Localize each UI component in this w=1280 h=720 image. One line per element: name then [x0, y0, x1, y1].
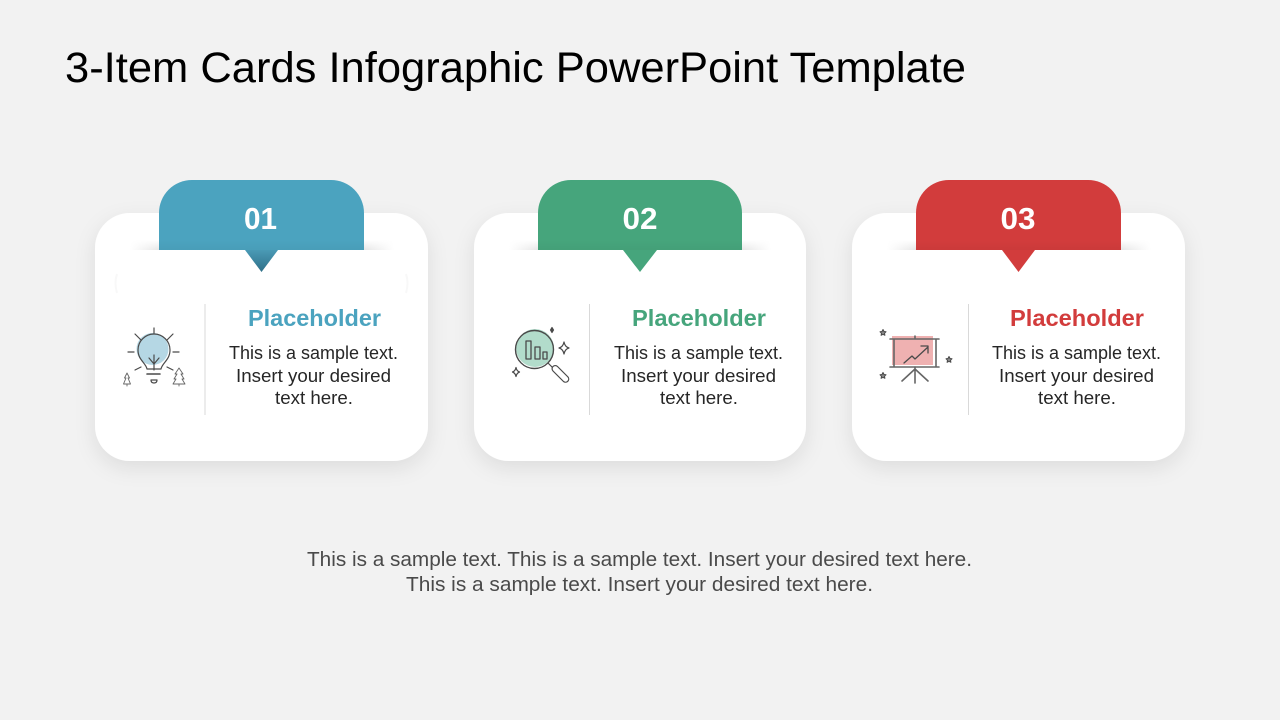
- panel: card 2: [474, 180, 806, 461]
- card 1 body text: text here.: [275, 388, 353, 408]
- card 1 pointer: [245, 250, 278, 272]
- card 3 background: [852, 213, 1185, 461]
- card 1 body text: [229, 343, 398, 408]
- card 1 number tab: [159, 180, 364, 250]
- card 3 body text: Insert your desired: [999, 366, 1154, 386]
- panel: card 3: [852, 180, 1185, 461]
- card 3 pointer: [1002, 250, 1035, 272]
- card 2 pointer: [623, 250, 657, 272]
- card 1 fold shadow: [130, 240, 394, 250]
- title: 3-Item Cards Infographic PowerPoint Template: [65, 44, 966, 92]
- footer text: This is a sample text. This is a sample text. Insert your desired text here.: [307, 549, 972, 571]
- card 1 heading: Placeholder: [248, 305, 381, 331]
- card 3 fold shadow: [887, 240, 1151, 250]
- card 1 body text: This is a sample text.: [229, 343, 398, 363]
- card 2 body text: This is a sample text.: [614, 343, 783, 363]
- card 1 tab lower shade: [159, 240, 364, 250]
- card 2 body text: Insert your desired: [621, 366, 776, 386]
- card 1 faint inner band: [116, 274, 408, 293]
- card 3 body text: text here.: [1038, 388, 1116, 408]
- panel: card 1: [95, 180, 428, 461]
- card 3 number tab: [916, 180, 1121, 250]
- icon: presentation board with chart: [880, 330, 952, 383]
- card 3 tab lower shade: [916, 240, 1121, 250]
- card 3 body text: This is a sample text.: [992, 343, 1161, 363]
- card 2 body text: [614, 343, 783, 408]
- card 2 background: [474, 213, 806, 461]
- card 3 number: 03: [1000, 201, 1036, 236]
- card 2 divider: [589, 304, 590, 415]
- card 1 number: 01: [244, 201, 277, 236]
- card 2 heading: Placeholder: [632, 305, 766, 331]
- card 1 body text: Insert your desired: [236, 366, 391, 386]
- icon: light bulb with trees: [124, 328, 185, 386]
- card 3 body text: [992, 343, 1161, 408]
- footer text: [307, 549, 972, 596]
- footer text: This is a sample text. Insert your desired text here.: [406, 574, 873, 596]
- card 2 body text: text here.: [660, 388, 738, 408]
- card 2 number tab: [538, 180, 742, 250]
- card 3 heading: Placeholder: [1010, 305, 1144, 331]
- icon: magnifier with bar chart: [512, 328, 569, 382]
- card 1 divider: [204, 304, 206, 415]
- card 2 fold shadow: [509, 240, 771, 250]
- card 3 divider: [968, 304, 969, 415]
- card 2 number: 02: [622, 201, 658, 236]
- card 2 tab lower shade: [538, 240, 742, 250]
- card 1 background: [95, 213, 428, 461]
